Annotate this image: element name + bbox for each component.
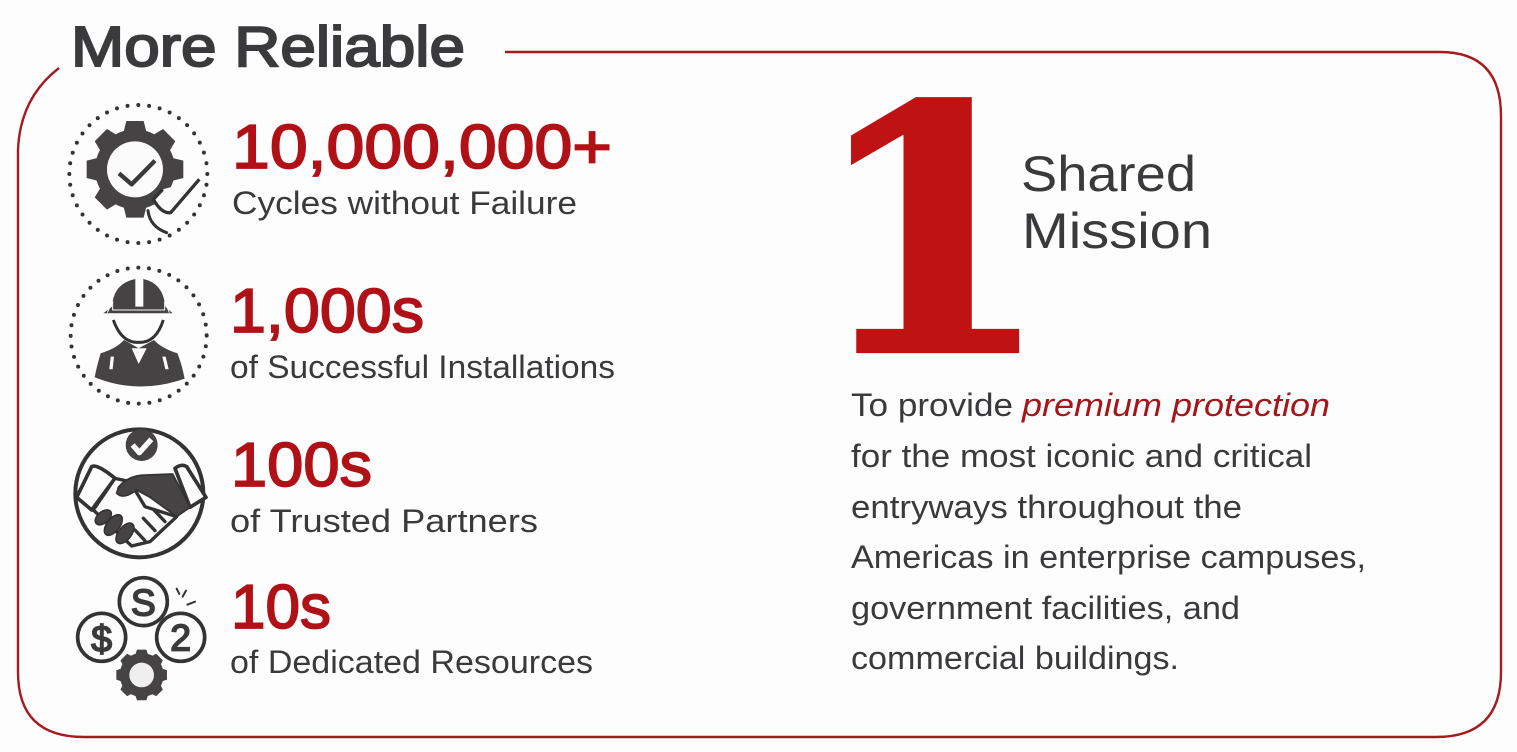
icon: handshake: [75, 429, 206, 557]
value: 1,000s: [230, 277, 424, 346]
label: of Successful Installations: [230, 349, 615, 385]
icon: worker with hard hat: [71, 268, 207, 404]
mission text block: To provide: [851, 387, 1013, 423]
icon: gear with check: [69, 105, 207, 243]
mission text block: premium protection: [1021, 387, 1330, 423]
label: of Dedicated Resources: [230, 644, 593, 680]
icon: coins and gear: [78, 578, 205, 700]
mission text block: entryways throughout the: [851, 489, 1242, 525]
value: 100s: [231, 431, 372, 500]
icon: coins and gear: S: [131, 581, 156, 623]
title: More Reliable: [71, 15, 465, 79]
mission text block: commercial buildings.: [851, 640, 1179, 676]
label: Cycles without Failure: [232, 185, 577, 221]
mission text block: Americas in enterprise campuses,: [851, 539, 1366, 575]
mission text block: [851, 387, 1366, 676]
icon: coins and gear: 2: [170, 617, 191, 659]
stat: installations: [71, 268, 615, 404]
heading: shared mission: Mission: [1022, 203, 1212, 259]
icon: coins and gear: $: [91, 617, 112, 659]
stat: cycles: [69, 105, 612, 243]
stat: partners: [75, 429, 538, 557]
mission text block: government facilities, and: [851, 590, 1240, 626]
heading: shared mission: Shared: [1021, 146, 1196, 202]
heading: shared mission: [1021, 146, 1212, 259]
value: 10s: [231, 573, 331, 642]
stat: resources: [78, 573, 593, 700]
label: of Trusted Partners: [230, 503, 538, 539]
mission text block: for the most iconic and critical: [851, 438, 1312, 474]
value: 10,000,000+: [232, 113, 612, 182]
big numeral 1: 1: [811, 32, 1051, 431]
